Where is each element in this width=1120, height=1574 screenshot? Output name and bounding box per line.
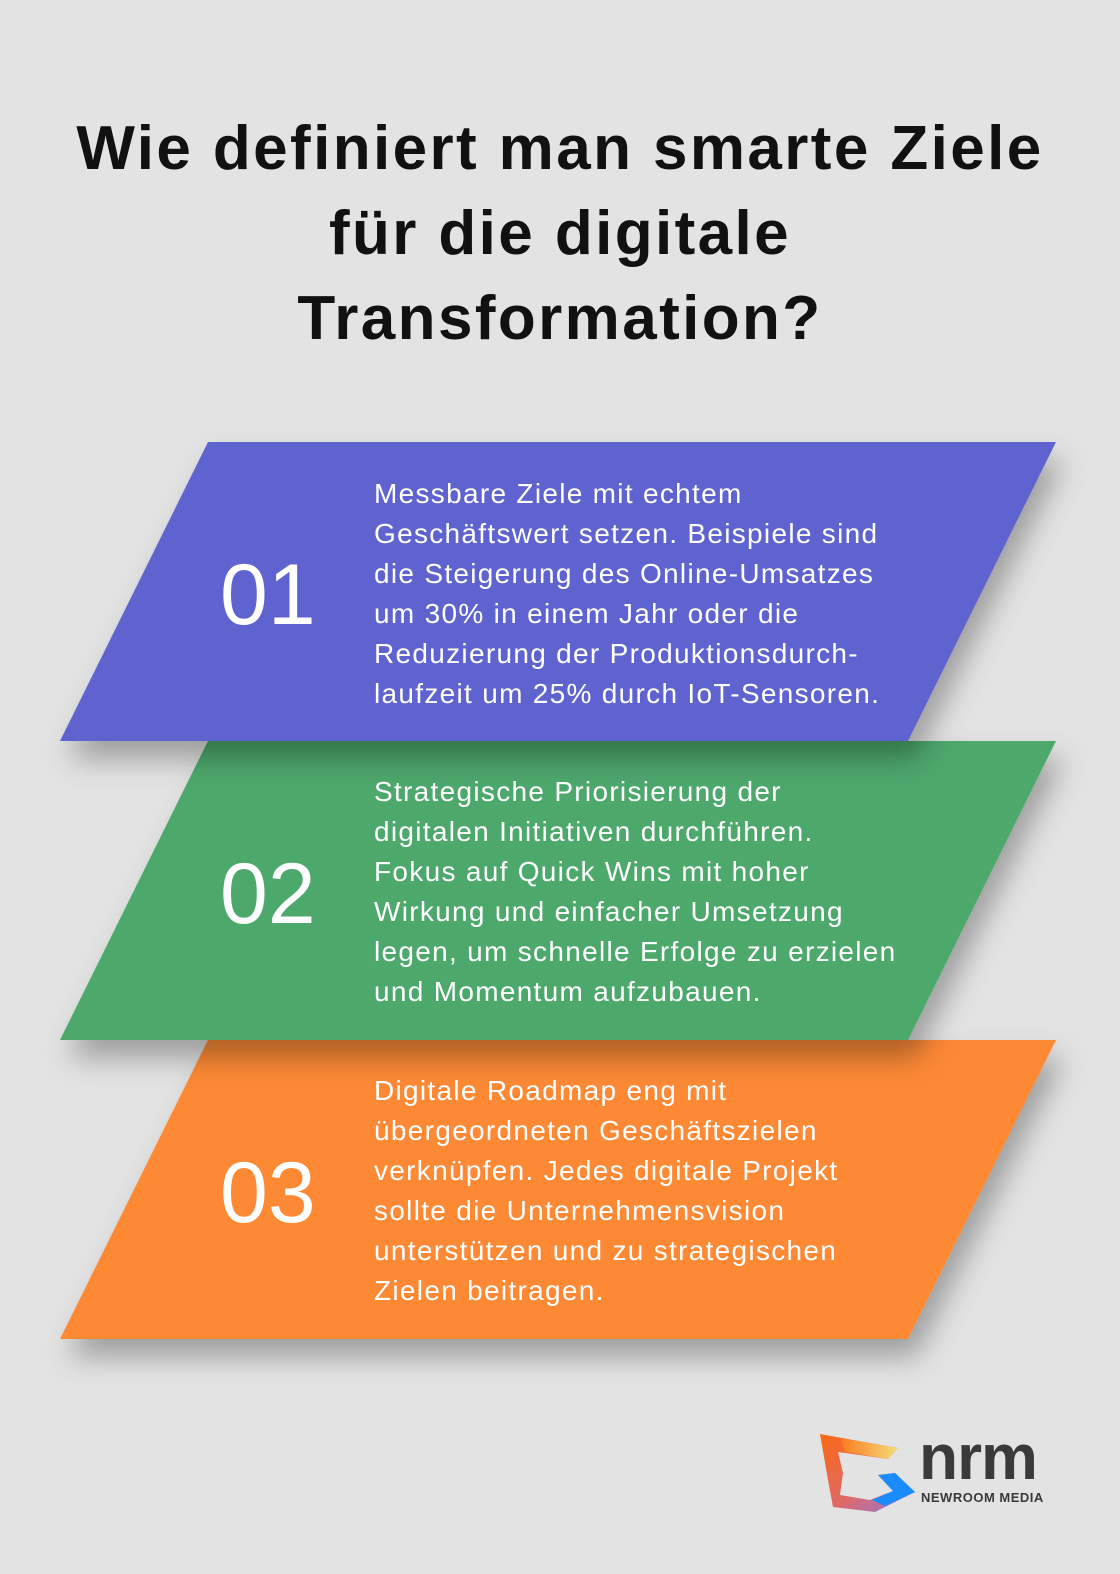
text 01: Geschäftswert setzen. Beispiele sind (374, 518, 878, 549)
icon: logo mark (820, 1434, 915, 1512)
text 02 (374, 776, 897, 1007)
title: für die digitale (329, 199, 791, 268)
text 03: Digitale Roadmap eng mit (374, 1075, 727, 1106)
text 02: legen, um schnelle Erfolge zu erzielen (374, 936, 897, 967)
logo text: nrm (919, 1421, 1037, 1493)
text 03: sollte die Unternehmensvision (374, 1195, 785, 1226)
number 01: 01 (220, 547, 316, 643)
text 03 (374, 1075, 838, 1306)
text 01: Reduzierung der Produktionsdurch- (374, 638, 859, 669)
logo: NEWROOM MEDIA (921, 1490, 1044, 1505)
text 03: unterstützen und zu strategischen (374, 1235, 837, 1266)
text 01: die Steigerung des Online-Umsatzes (374, 558, 874, 589)
panel: 02 (220, 776, 897, 1007)
panel: 03 (220, 1075, 838, 1306)
text 02: Strategische Priorisierung der (374, 776, 782, 807)
logo (820, 1421, 1044, 1512)
text 02: Wirkung und einfacher Umsetzung (374, 896, 844, 927)
text 01: Messbare Ziele mit echtem (374, 478, 743, 509)
text 01: laufzeit um 25% durch IoT-Sensoren. (374, 678, 880, 709)
title: Wie definiert man smarte Ziele (76, 114, 1044, 183)
title: Transformation? (297, 284, 823, 353)
text 03: Zielen beitragen. (374, 1275, 605, 1306)
text 02: Fokus auf Quick Wins mit hoher (374, 856, 810, 887)
text 02: digitalen Initiativen durchführen. (374, 816, 814, 847)
text 03: verknüpfen. Jedes digitale Projekt (374, 1155, 838, 1186)
number 02: 02 (220, 846, 316, 942)
text 02: und Momentum aufzubauen. (374, 976, 762, 1007)
text 01: um 30% in einem Jahr oder die (374, 598, 799, 629)
text 01 (374, 478, 880, 709)
text 03: übergeordneten Geschäftszielen (374, 1115, 818, 1146)
number 03: 03 (220, 1145, 316, 1241)
title (76, 114, 1044, 353)
panel: 01 (220, 478, 880, 709)
